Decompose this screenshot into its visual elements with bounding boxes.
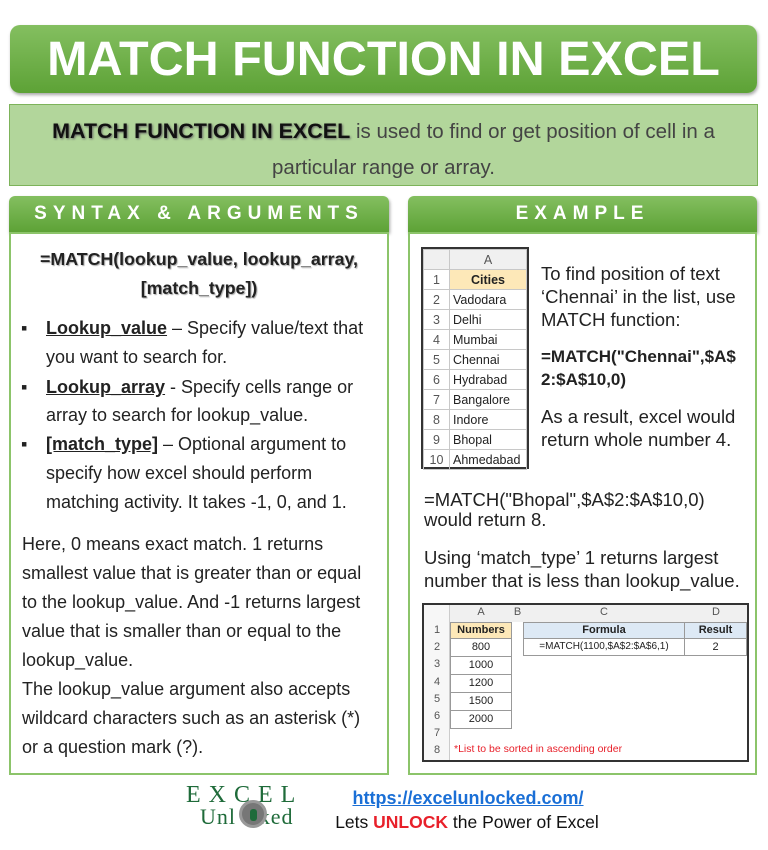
- subtitle box: MATCH FUNCTION IN EXCEL is used to find or get position of cell in a: [52, 119, 715, 143]
- numbers table: 1000: [469, 659, 493, 671]
- numbers table: 7: [434, 727, 440, 739]
- bullets: Lookup_value – Specify value/text that: [46, 318, 363, 338]
- numbers table: [422, 603, 749, 762]
- subtitle box: [9, 104, 758, 186]
- cities table: Chennai: [453, 352, 500, 366]
- example text 2: would return 8.: [424, 509, 546, 530]
- numbers table: D: [712, 606, 720, 618]
- cities table: A: [484, 252, 492, 266]
- numbers table: 8: [434, 744, 440, 756]
- tagline: Lets UNLOCK the Power of Excel: [335, 812, 599, 832]
- numbers table: C: [600, 606, 608, 618]
- cities table: 8: [433, 412, 440, 426]
- footer url: https://excelunlocked.com/: [352, 788, 584, 808]
- explanation paragraph: Here, 0 means exact match. 1 returns: [22, 534, 323, 554]
- explanation paragraph: or a question mark (?).: [22, 737, 203, 757]
- numbers table: B: [514, 606, 521, 618]
- header: example: [408, 196, 757, 232]
- explanation paragraph: [22, 534, 361, 757]
- panel: example: [408, 232, 757, 775]
- numbers table: *List to be sorted in ascending order: [454, 743, 622, 755]
- example text 1: MATCH function:: [541, 309, 680, 330]
- cities table: Ahmedabad: [453, 452, 520, 466]
- example text 2: Using ‘match_type’ 1 returns largest: [424, 547, 718, 568]
- cities table: Vadodara: [453, 292, 506, 306]
- numbers table: A: [477, 606, 485, 618]
- bullets: ▪: [21, 434, 27, 454]
- bullets: you want to search for.: [46, 347, 227, 367]
- cities table: [421, 247, 529, 469]
- syntax formula: [match_type]): [141, 278, 257, 298]
- explanation paragraph: wildcard characters such as an asterisk (*): [22, 708, 360, 728]
- bullets: [match_type] – Optional argument to: [46, 434, 346, 454]
- example text 1: 2:$A$10,0): [541, 370, 626, 389]
- example text 2: =MATCH("Bhopal",$A$2:$A$10,0): [424, 489, 705, 510]
- bullets: ▪: [21, 377, 27, 397]
- cities table: Cities: [471, 272, 505, 286]
- cities table: 1: [433, 272, 440, 286]
- explanation paragraph: value that is smaller than or equal to the: [22, 621, 341, 641]
- bullets: specify how excel should perform: [46, 463, 312, 483]
- numbers table: 6: [434, 710, 440, 722]
- cities table: Mumbai: [453, 332, 497, 346]
- syntax formula: [40, 249, 358, 299]
- cities table: Indore: [453, 412, 488, 426]
- logo: [186, 782, 303, 829]
- numbers table: Formula: [582, 624, 626, 636]
- cities table: 5: [433, 352, 440, 366]
- numbers table: 1: [434, 624, 440, 636]
- numbers table: 2: [434, 641, 440, 653]
- numbers table: 2000: [469, 713, 493, 725]
- example text 1: ‘Chennai’ in the list, use: [541, 286, 736, 307]
- bullets: matching activity. It takes -1, 0, and 1.: [46, 492, 347, 512]
- bullets: ▪: [21, 318, 27, 338]
- cities table: Hydrabad: [453, 372, 507, 386]
- cities table: 2: [433, 292, 440, 306]
- numbers table: 4: [434, 676, 440, 688]
- example text 1: [541, 263, 736, 450]
- example text 1: As a result, excel would: [541, 406, 735, 427]
- cities table: Delhi: [453, 312, 482, 326]
- example text 1: To find position of text: [541, 263, 720, 284]
- cities table: 4: [433, 332, 440, 346]
- header: syntax: SYNTAX & ARGUMENTS: [34, 203, 364, 224]
- logo: EXCEL: [186, 782, 303, 808]
- example text 1: return whole number 4.: [541, 429, 731, 450]
- panel: syntax: [9, 232, 389, 775]
- cities table: 6: [433, 372, 440, 386]
- explanation paragraph: The lookup_value argument also accepts: [22, 679, 350, 699]
- numbers table: Result: [699, 624, 732, 636]
- cities table: 3: [433, 312, 440, 326]
- numbers table: 800: [472, 641, 490, 653]
- icon: lock: [239, 800, 267, 828]
- syntax formula: =MATCH(lookup_value, lookup_array,: [40, 249, 358, 269]
- explanation paragraph: smallest value that is greater than or equal: [22, 563, 361, 583]
- cities table: 7: [433, 392, 440, 406]
- numbers table: 1500: [469, 695, 493, 707]
- bullets: Lookup_array - Specify cells range or: [46, 377, 353, 397]
- header: syntax: [9, 196, 389, 232]
- cities table: 10: [430, 452, 443, 466]
- numbers table: 1200: [469, 677, 493, 689]
- logo: Unlocked: [200, 804, 294, 829]
- bullets: array to search for lookup_value.: [46, 405, 308, 425]
- numbers table: 3: [434, 658, 440, 670]
- numbers table: =MATCH(1100,$A$2:$A$6,1): [539, 641, 669, 652]
- explanation paragraph: lookup_value.: [22, 650, 133, 670]
- cities table: 9: [433, 432, 440, 446]
- example text 2: [424, 489, 740, 591]
- numbers table: 5: [434, 693, 440, 705]
- explanation paragraph: to the lookup_value. And -1 returns largest: [22, 592, 360, 612]
- header: example: EXAMPLE: [516, 203, 649, 224]
- bullets: [21, 318, 363, 512]
- numbers table: 2: [712, 641, 719, 653]
- subtitle box: particular range or array.: [272, 156, 495, 179]
- title: MATCH FUNCTION IN EXCEL: [47, 32, 720, 86]
- numbers table: Numbers: [457, 624, 505, 636]
- example text 1: =MATCH("Chennai",$A$: [541, 347, 736, 366]
- cities table: Bhopal: [453, 432, 492, 446]
- example text 2: number that is less than lookup_value.: [424, 570, 740, 591]
- cities table: Bangalore: [453, 392, 510, 406]
